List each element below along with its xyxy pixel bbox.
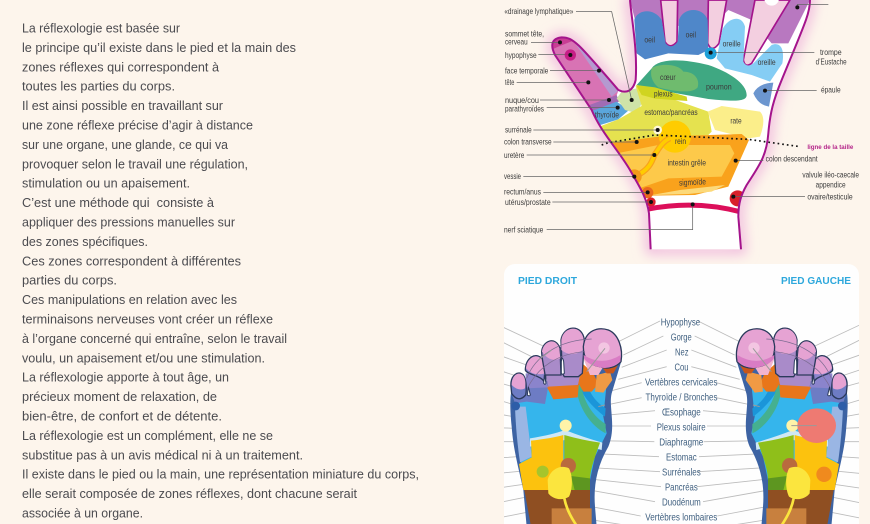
text block: réflexologie description: terminaisons nerveuses vont créer un réflexe bbox=[22, 312, 273, 326]
foot labels: Estomac bbox=[666, 452, 697, 464]
hand glow bbox=[552, 0, 810, 249]
hand labels: épaule bbox=[821, 85, 841, 95]
hand labels: colon transverse bbox=[504, 137, 552, 147]
heading: pied gauche: PIED GAUCHE bbox=[781, 275, 851, 287]
hand labels: oeil bbox=[686, 29, 696, 39]
foot labels: Gorge bbox=[671, 332, 692, 344]
text block: réflexologie description: parties du corps. bbox=[22, 273, 117, 288]
chart: hand reflexology map bbox=[504, 0, 859, 253]
foot labels bbox=[645, 316, 718, 524]
text block: réflexologie description: précieux moment de relaxation, de bbox=[22, 389, 217, 404]
toes bbox=[511, 373, 526, 399]
text block: réflexologie description: Ces zones correspondent à différentes bbox=[22, 253, 241, 268]
foot labels: Vertèbres lombaires bbox=[645, 512, 717, 524]
hand labels: surrénale bbox=[505, 124, 532, 134]
foot labels: Hypophyse bbox=[661, 316, 700, 328]
hand labels: d’Eustache bbox=[816, 57, 847, 67]
foot labels: Thyroïde / Bronches bbox=[646, 392, 718, 404]
text block: réflexologie description bbox=[22, 20, 419, 520]
hand zones bbox=[545, 0, 818, 253]
hand labels: estomac/pancréas bbox=[644, 107, 698, 117]
text block: réflexologie description: voulu, un apaisement et/ou une stimulation. bbox=[22, 350, 265, 365]
text block: réflexologie description: substitue pas à un avis médical ni à un traitement. bbox=[22, 447, 303, 462]
hand labels bbox=[504, 6, 859, 234]
text block: réflexologie description: toutes les parties du corps. bbox=[22, 79, 175, 94]
text block: réflexologie description: une zone réflexe précise d’agir à distance bbox=[22, 118, 253, 132]
text block: réflexologie description: Il est ainsi possible en travaillant sur bbox=[22, 98, 224, 113]
hand labels: cœur bbox=[660, 72, 676, 82]
hand labels: ovaire/testicule bbox=[807, 192, 853, 202]
icon: right foot zones bbox=[498, 321, 667, 524]
text block: réflexologie description: associée à un organe. bbox=[22, 506, 143, 520]
hand labels: ligne de la taille bbox=[807, 144, 854, 151]
foot labels: Pancréas bbox=[665, 482, 698, 494]
hand labels: tête bbox=[505, 77, 515, 87]
hand labels: poumon bbox=[706, 81, 732, 91]
heading: pied droit: PIED DROIT bbox=[518, 275, 578, 287]
panel: foot reflexology chart bbox=[498, 264, 860, 524]
hand labels: trompe bbox=[820, 47, 842, 57]
hand labels: oeil bbox=[644, 34, 655, 44]
text block: réflexologie description: provoquer selon le travail une régulation, bbox=[22, 156, 248, 171]
text block: réflexologie description: La réflexologie est basée sur bbox=[22, 20, 181, 36]
text block: réflexologie description: La réflexologie apporte à tout âge, un bbox=[22, 370, 229, 385]
trompe circle bbox=[705, 47, 717, 59]
foot labels: Duodénum bbox=[662, 496, 701, 508]
foot labels: Surrénales bbox=[662, 466, 701, 478]
hand labels: rate bbox=[730, 115, 742, 125]
text block: réflexologie description: C’est une méthode qui consiste à bbox=[22, 195, 215, 210]
text block: réflexologie description: sur une organe, une glande, ce qui va bbox=[22, 137, 229, 152]
hand labels: oreille bbox=[758, 57, 776, 67]
hand outline bbox=[552, 0, 810, 249]
hand labels: face temporale bbox=[505, 65, 549, 75]
foot labels: Plexus solaire bbox=[657, 422, 706, 434]
foot labels: Vertèbres cervicales bbox=[645, 376, 718, 388]
text block: réflexologie description: appliquer des pressions manuelles sur bbox=[22, 214, 236, 230]
text block: réflexologie description: Ces manipulations en relation avec les bbox=[22, 292, 237, 307]
hand labels: uretère bbox=[504, 150, 525, 160]
hand labels: oreille bbox=[723, 39, 741, 49]
icon: left foot zones bbox=[691, 321, 860, 524]
hand labels: hypophyse bbox=[505, 50, 537, 60]
text block: réflexologie description: bien-être, de confort et de détente. bbox=[22, 408, 222, 424]
text block: réflexologie description: La réflexologie est un complément, elle ne se bbox=[22, 428, 273, 443]
hand labels: appendice bbox=[816, 179, 846, 189]
foot labels: Cou bbox=[674, 362, 689, 374]
leader lines bbox=[517, 4, 828, 230]
foot labels: Nez bbox=[675, 346, 688, 358]
hand labels: cerveau bbox=[505, 37, 528, 47]
foot labels: Diaphragme bbox=[659, 436, 703, 448]
hand labels: nuque/cou bbox=[505, 95, 539, 105]
text block: réflexologie description: des zones spécifiques. bbox=[22, 234, 148, 249]
hand labels: sigmoïde bbox=[679, 176, 706, 188]
hand labels: intestin grêle bbox=[668, 158, 706, 168]
hand labels: rein bbox=[675, 136, 686, 146]
hand labels: sommet tête, bbox=[505, 29, 544, 39]
text block: réflexologie description: Il existe dans le pied ou la main, une représentation miniature du corps, bbox=[22, 467, 419, 482]
text block: réflexologie description: à l’organe concerné qui entraîne, selon le travail bbox=[22, 331, 287, 346]
hand labels: colon descendant bbox=[766, 154, 818, 164]
text block: réflexologie description: le principe qu’il existe dans le pied et la main des bbox=[22, 40, 296, 55]
hand labels: parathyroïdes bbox=[505, 104, 544, 114]
hand labels: «drainage lymphatique» bbox=[504, 6, 574, 16]
hand labels: utérus/prostate bbox=[505, 197, 551, 207]
waist dotted line bbox=[602, 135, 800, 147]
text block: réflexologie description: zones réflexes qui correspondent à bbox=[22, 59, 220, 74]
hand labels: plexus bbox=[654, 88, 673, 98]
hand labels: rectum/anus bbox=[504, 187, 541, 197]
hand labels: nerf sciatique bbox=[504, 224, 544, 234]
foot labels: Œsophage bbox=[662, 406, 701, 418]
hand labels: vessie bbox=[504, 171, 521, 181]
hand labels: thyroïde bbox=[595, 109, 619, 119]
text block: réflexologie description: elle serait composée de zones réflexes, dont chacune serait bbox=[22, 486, 357, 501]
text block: réflexologie description: stimulation ou un apaisement. bbox=[22, 176, 190, 191]
